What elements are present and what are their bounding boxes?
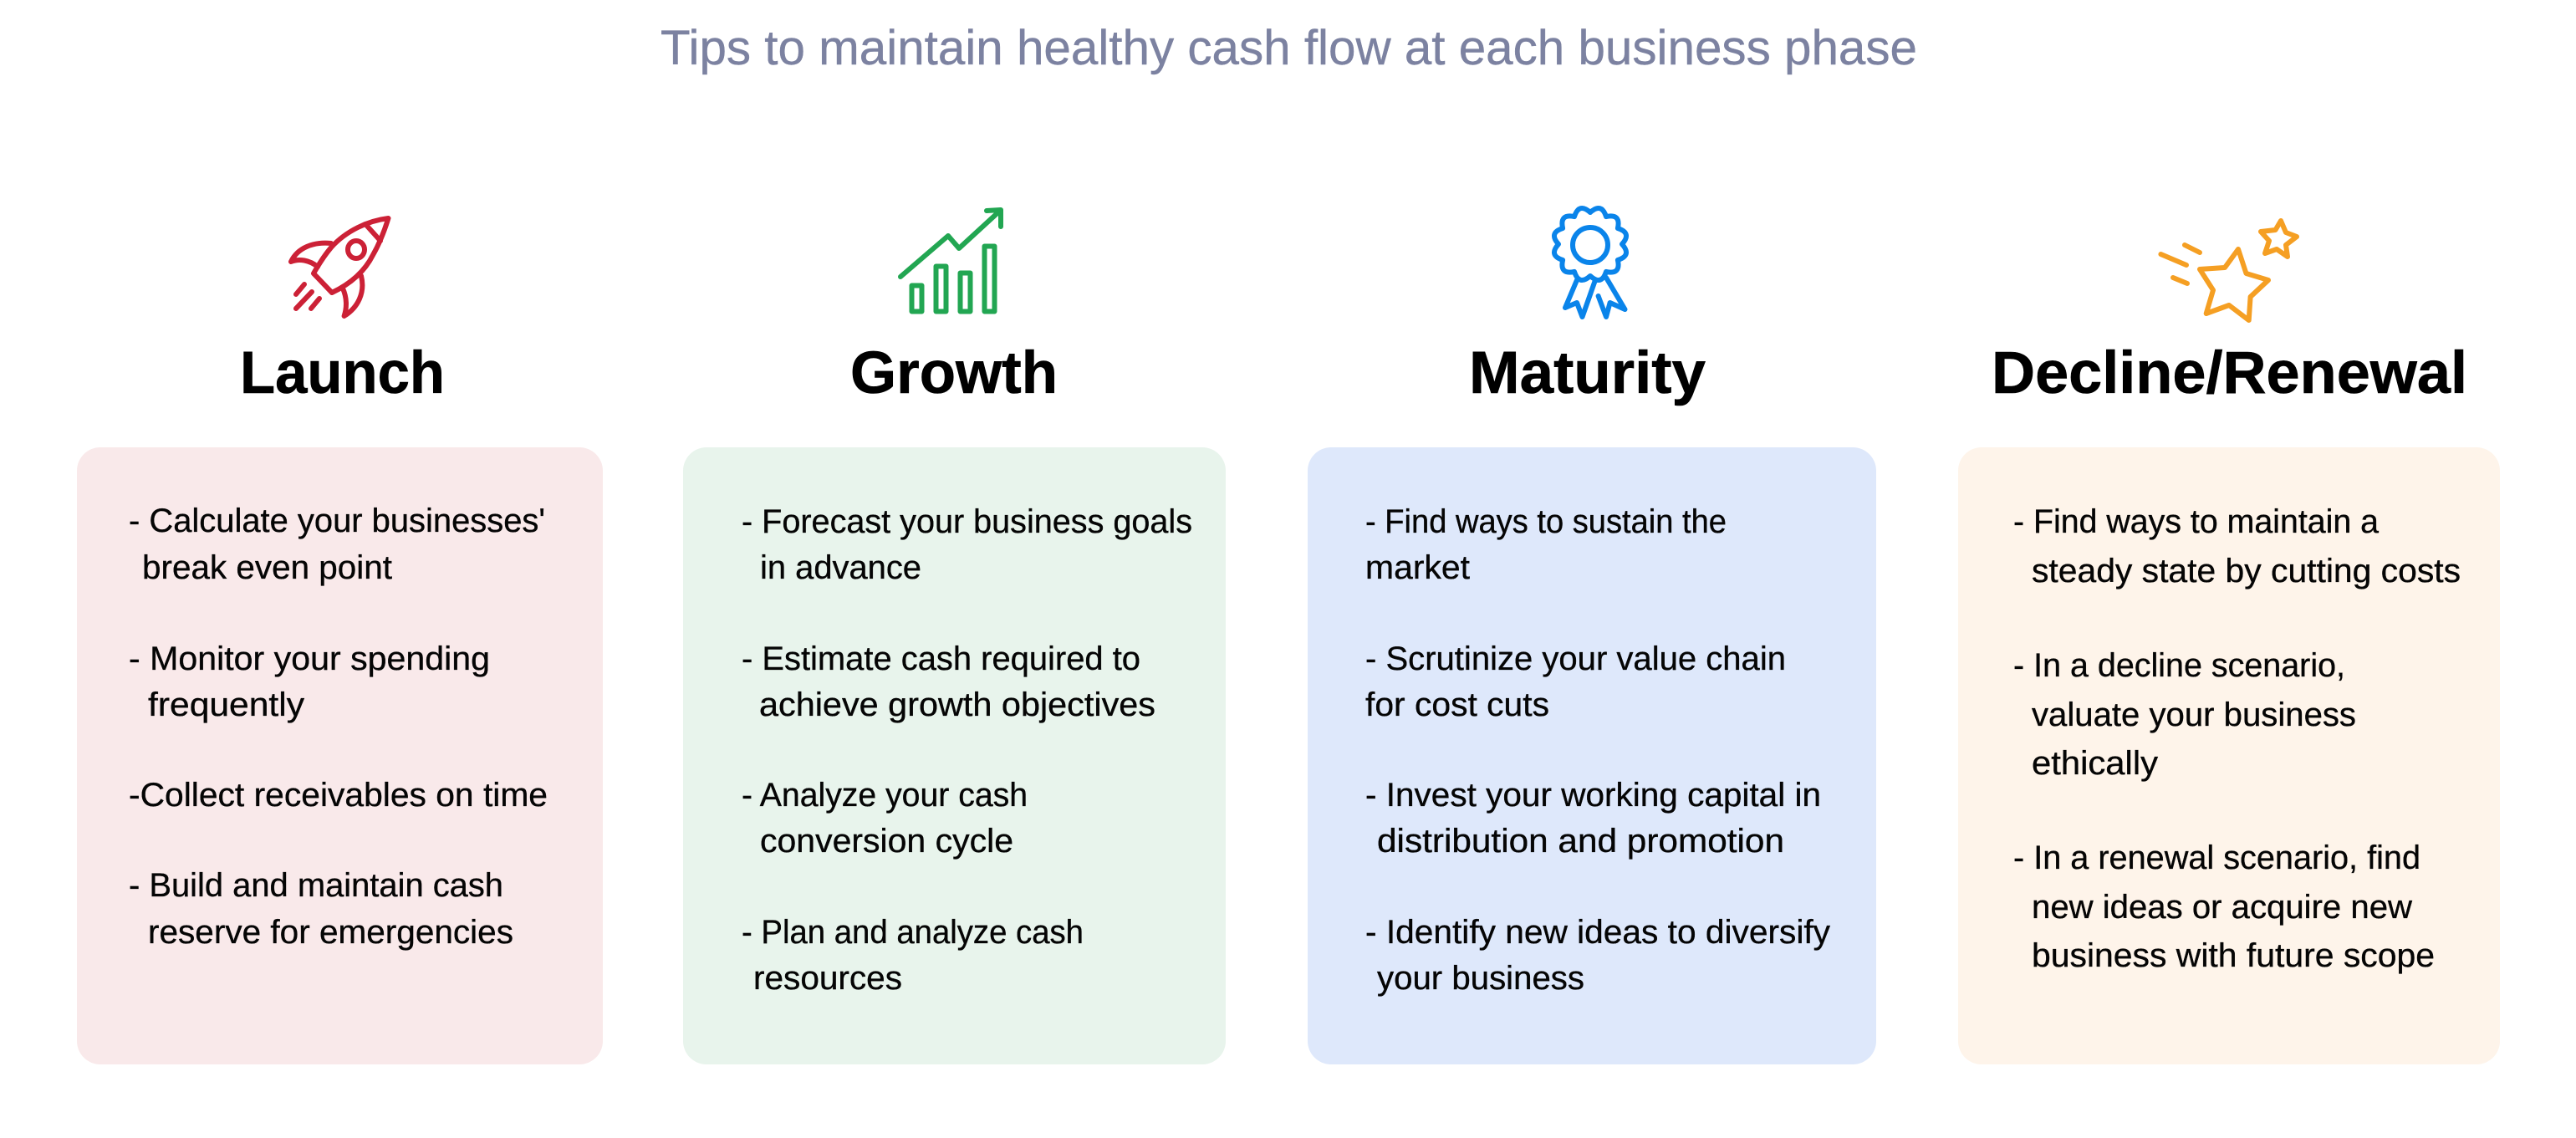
tip: forecast goals <box>742 503 1192 586</box>
tip: decline scenario: - In a decline scenario, <box>2013 647 2345 684</box>
tip: cash reserve <box>129 867 513 951</box>
tip: diversify <box>1365 914 1830 997</box>
tip: cash resources: resources <box>753 960 902 997</box>
tip: renewal scenario <box>2013 839 2435 974</box>
tip: sustain market <box>1365 503 1727 586</box>
column: launch <box>77 218 603 1064</box>
tip: cash conversion: - Analyze your cash <box>742 777 1028 814</box>
tip: steady state: - Find ways to maintain a <box>2013 503 2380 540</box>
tip: break even point: - Calculate your businesses' <box>129 503 545 539</box>
tip: break even point: break even point <box>142 549 392 586</box>
tip: monitor spending: frequently <box>148 686 304 723</box>
tip: renewal scenario: - In a renewal scenario, find <box>2013 839 2420 876</box>
panel: maturity tips <box>1308 447 1876 1064</box>
panel: decline/renewal tips <box>1958 447 2500 1064</box>
tip: break even point <box>129 503 545 586</box>
column: growth <box>683 210 1226 1064</box>
tip: cash conversion: conversion cycle <box>760 823 1013 860</box>
tip: cash resources: - Plan and analyze cash <box>742 914 1084 951</box>
heading: Maturity: Maturity <box>1469 340 1706 406</box>
tip: sustain market: market <box>1365 549 1470 586</box>
tip: value chain: - Scrutinize your value chain <box>1365 640 1786 677</box>
icon: growth chart <box>900 210 1001 311</box>
tip: value chain <box>1365 640 1786 723</box>
tip: estimate cash <box>742 640 1155 723</box>
tip: working capital <box>1365 777 1821 860</box>
heading: Growth: Growth <box>850 340 1058 406</box>
column: decline/renewal <box>1958 221 2500 1064</box>
tip: forecast goals: in advance <box>760 549 921 586</box>
title: Tips to maintain healthy cash flow at each business phase <box>661 21 1917 75</box>
tip: steady state <box>2013 503 2461 589</box>
tip: collect receivables: -Collect receivables on time <box>129 777 548 814</box>
tip: diversify: your business <box>1377 960 1584 997</box>
tip: renewal scenario: new ideas or acquire new <box>2032 889 2412 926</box>
tip: steady state: steady state by cutting costs <box>2032 553 2461 589</box>
tip: value chain: for cost cuts <box>1365 686 1549 723</box>
heading: Decline/Renewal: Decline/Renewal <box>1992 340 2467 406</box>
tip: estimate cash: achieve growth objectives <box>759 686 1155 723</box>
tip: forecast goals: - Forecast your business goals <box>742 503 1192 540</box>
panel: launch tips <box>77 447 603 1064</box>
tip: cash resources <box>742 914 1084 997</box>
tip: cash reserve: reserve for emergencies <box>148 914 513 951</box>
tip: sustain market: - Find ways to sustain the <box>1365 503 1727 540</box>
tip: decline scenario: valuate your business <box>2032 697 2356 733</box>
icon: rocket <box>291 218 388 316</box>
tip: monitor spending <box>129 640 490 723</box>
tip: decline scenario: ethically <box>2032 745 2158 782</box>
tip: cash reserve: - Build and maintain cash <box>129 867 503 904</box>
tip: decline scenario <box>2013 647 2356 782</box>
heading: Launch: Launch <box>240 340 445 406</box>
icon: stars <box>2160 221 2297 320</box>
tip: estimate cash: - Estimate cash required to <box>742 640 1140 677</box>
tip: working capital: - Invest your working capital in <box>1365 777 1821 814</box>
tip: diversify: - Identify new ideas to diversify <box>1365 914 1830 951</box>
panel: growth tips <box>683 447 1226 1064</box>
tip: monitor spending: - Monitor your spending <box>129 640 490 677</box>
tip: cash conversion <box>742 777 1028 860</box>
tip: working capital: distribution and promotion <box>1377 823 1784 860</box>
tip: renewal scenario: business with future scope <box>2032 937 2435 974</box>
icon: award ribbon <box>1554 208 1626 317</box>
column: maturity <box>1308 208 1876 1064</box>
